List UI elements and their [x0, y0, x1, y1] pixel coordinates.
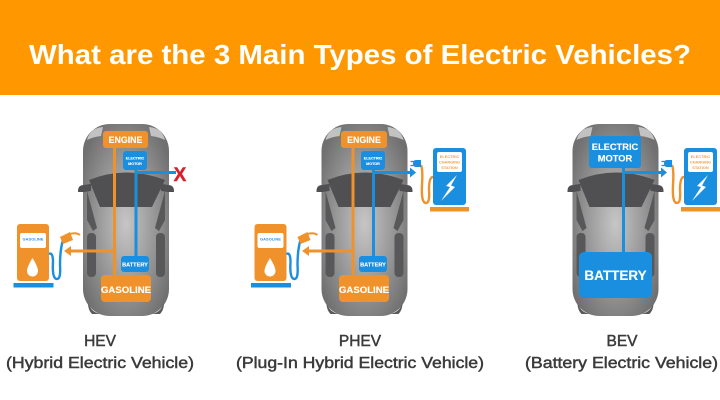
- title: What are the 3 Main Types of Electric Vehicles?: [29, 39, 691, 70]
- engine box: [103, 131, 148, 148]
- label: BEV: BEV: [606, 333, 638, 350]
- electric motor box: ELECTRIC: [126, 156, 145, 160]
- engine box: [341, 131, 387, 148]
- label: HEV: HEV: [84, 333, 117, 350]
- battery box: [121, 256, 149, 272]
- icon: red X: X: [174, 165, 187, 186]
- electric motor box: MOTOR: [128, 162, 142, 166]
- label: HEV: (Hybrid Electric Vehicle): [6, 355, 194, 372]
- arrow: motor, battery and charging line: [624, 167, 662, 252]
- electric motor box: [361, 151, 385, 170]
- car body: HEV: [79, 124, 173, 316]
- icon: charging station: [662, 148, 720, 212]
- battery box: BATTERY: [360, 262, 386, 268]
- battery box: [359, 256, 387, 272]
- electric motor box: ELECTRIC: [592, 142, 639, 152]
- arrow: gasoline to engine line: [69, 148, 114, 276]
- label: PHEV: (Plug-In Hybrid Electric Vehicle): [236, 355, 484, 372]
- battery box: BATTERY: [122, 262, 148, 268]
- electric motor box: ELECTRIC: [364, 156, 383, 160]
- arrowhead: [410, 168, 416, 178]
- battery box: [579, 252, 652, 298]
- electric motor box: MOTOR: [598, 154, 632, 164]
- arrowhead: to pump: [302, 246, 309, 256]
- panel: PHEV: [236, 124, 484, 372]
- electric motor box: MOTOR: [366, 162, 380, 166]
- label: HEV: [6, 333, 194, 372]
- arrowhead: to pump: [64, 246, 71, 256]
- gasoline box: [339, 275, 390, 302]
- arrow: gasoline to engine line: [307, 148, 353, 276]
- electric motor box: [589, 136, 641, 168]
- engine box: ENGINE: [109, 135, 142, 145]
- car body: PHEV: [318, 124, 412, 316]
- label: BEV: (Battery Electric Vehicle): [525, 355, 718, 372]
- label: PHEV: PHEV: [339, 333, 382, 350]
- gasoline box: GASOLINE: [101, 285, 152, 296]
- car body: BEV: [568, 124, 662, 316]
- panel: BEV: [525, 124, 720, 372]
- label: PHEV: [236, 333, 484, 372]
- icon: gasoline pump: [14, 224, 80, 288]
- icon: gasoline pump: [251, 224, 318, 288]
- arrowhead: [661, 168, 667, 178]
- title banner: [0, 0, 720, 95]
- label: BEV: [525, 333, 718, 372]
- battery box: BATTERY: [584, 268, 647, 283]
- icon: charging station: [410, 148, 469, 212]
- arrow: motor to charging station: [374, 170, 411, 256]
- gasoline box: GASOLINE: [339, 285, 390, 296]
- electric motor box: [123, 151, 147, 170]
- engine box: ENGINE: [347, 135, 381, 145]
- gasoline box: [101, 275, 152, 302]
- arrow: motor to battery line: [136, 170, 176, 256]
- panel: HEV: [6, 124, 194, 372]
